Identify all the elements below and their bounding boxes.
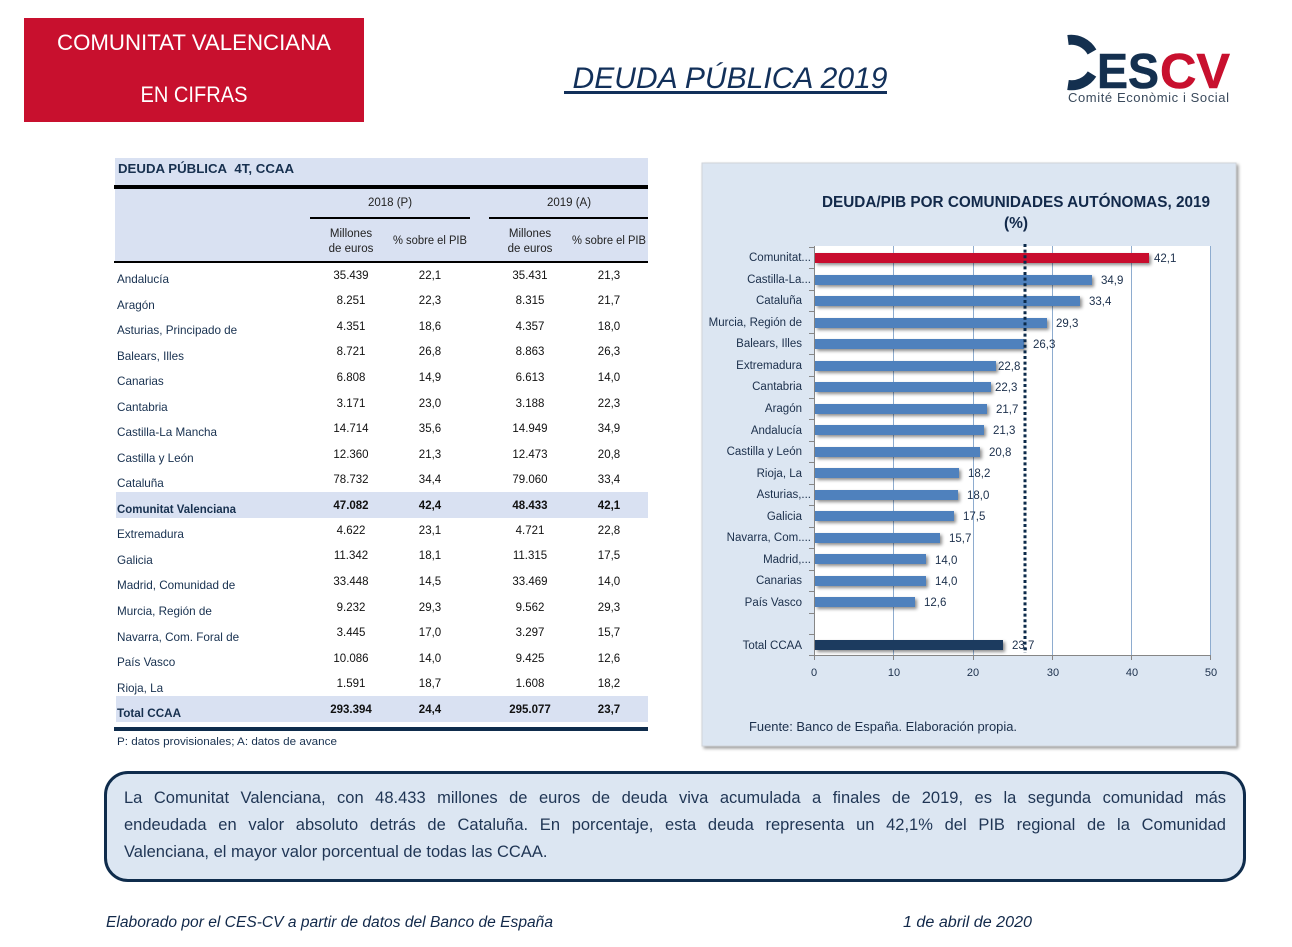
table rows: 33.448 bbox=[333, 576, 369, 588]
table rows: 14,9 bbox=[419, 372, 441, 384]
data labels: 17,5 bbox=[963, 511, 985, 523]
table rows: 4.357 bbox=[516, 321, 544, 333]
table rows: Extremadura bbox=[117, 528, 184, 541]
table rows: Murcia, Región de bbox=[117, 605, 212, 618]
table rows: 79.060 bbox=[512, 474, 548, 486]
table rows: 12.360 bbox=[333, 449, 369, 461]
table rows: 18,2 bbox=[598, 678, 620, 690]
table rows: 22,1 bbox=[419, 270, 441, 282]
table rows: Navarra, Com. Foral de bbox=[117, 631, 239, 644]
banner: Comunitat Valenciana en cifras bbox=[24, 18, 364, 122]
table rows: Madrid, Comunidad de bbox=[117, 579, 235, 592]
table rows: 9.425 bbox=[516, 653, 544, 665]
category labels: Navarra, Com.... bbox=[727, 532, 811, 544]
table rows: 12,6 bbox=[598, 653, 620, 665]
table rows: 21,3 bbox=[419, 449, 441, 461]
table column headers: 2018 (P) bbox=[368, 197, 412, 209]
data labels: 20,8 bbox=[989, 447, 1011, 459]
table rows: Aragón bbox=[117, 299, 155, 312]
table rows: 14.949 bbox=[512, 423, 548, 435]
table rows: 22,8 bbox=[598, 525, 620, 537]
x axis labels: 20 bbox=[967, 667, 979, 679]
data labels: 26,3 bbox=[1033, 339, 1055, 351]
table rows: Rioja, La bbox=[117, 682, 164, 695]
x axis labels: 50 bbox=[1205, 667, 1217, 679]
table rows: 295.077 bbox=[509, 704, 551, 716]
x axis labels: 40 bbox=[1126, 667, 1138, 679]
dotted average line bbox=[1024, 244, 1026, 653]
table rows: 12.473 bbox=[512, 449, 548, 461]
table rows: 42,1 bbox=[598, 500, 621, 512]
table rows: 8.863 bbox=[516, 346, 544, 358]
table rows: 35.439 bbox=[333, 270, 369, 282]
table rows: 21,3 bbox=[598, 270, 620, 282]
table rows: Castilla-La Mancha bbox=[117, 426, 218, 439]
table rows: 10.086 bbox=[333, 653, 369, 665]
chart source: Fuente: Banco de España. Elaboración propia. bbox=[749, 720, 1017, 734]
data labels: 21,7 bbox=[996, 404, 1018, 416]
data labels: 33,4 bbox=[1089, 296, 1112, 308]
table rows: 15,7 bbox=[598, 627, 620, 639]
table rows: Castilla y León bbox=[117, 452, 194, 465]
data labels: 14,0 bbox=[935, 555, 957, 567]
table rows: Galicia bbox=[117, 554, 153, 567]
banner: Comunitat Valenciana en cifras: EN CIFRAS bbox=[140, 82, 248, 107]
table rows: 14,0 bbox=[598, 576, 620, 588]
category labels: Aragón bbox=[765, 403, 802, 415]
category labels: Castilla-La... bbox=[747, 274, 811, 286]
table rows: Comunitat Valenciana bbox=[117, 503, 236, 516]
table rows: 17,0 bbox=[419, 627, 441, 639]
category labels: Comunitat... bbox=[749, 252, 811, 264]
table column headers: de euros bbox=[508, 243, 553, 255]
table rows: 42,4 bbox=[419, 500, 442, 512]
callout bbox=[104, 771, 1246, 882]
table rows: País Vasco bbox=[117, 656, 176, 669]
data labels: 22,8 bbox=[998, 361, 1020, 373]
category labels: Murcia, Región de bbox=[709, 317, 802, 329]
category labels: Cantabria bbox=[752, 381, 803, 393]
table rows: 35.431 bbox=[512, 270, 548, 282]
table rows: 34,4 bbox=[419, 474, 442, 486]
table heading: DEUDA PÚBLICA 4T, CCAA bbox=[118, 161, 295, 176]
table rows: 1.591 bbox=[337, 678, 365, 690]
table footnote: P: datos provisionales; A: datos de avance bbox=[117, 736, 337, 748]
category labels: Canarias bbox=[756, 575, 802, 587]
table rows: 18,1 bbox=[419, 550, 441, 562]
table rows: 22,3 bbox=[598, 398, 620, 410]
table column headers: % sobre el PIB bbox=[393, 235, 467, 247]
table rows: 14.714 bbox=[333, 423, 369, 435]
category labels: Balears, Illes bbox=[736, 338, 802, 350]
data labels: 29,3 bbox=[1056, 318, 1078, 330]
x axis labels: 30 bbox=[1047, 667, 1059, 679]
table rows: 4.622 bbox=[337, 525, 365, 537]
table rows: 11.342 bbox=[334, 550, 368, 562]
callout: endeudada en valor absoluto detrás de Cataluña. En porcentaje, esta deuda representa un 42,1% del PIB regional de la Comunidad bbox=[124, 816, 1226, 834]
table rows: 26,8 bbox=[419, 346, 441, 358]
data labels bbox=[924, 253, 1176, 652]
table rows: 33.469 bbox=[512, 576, 548, 588]
footer right: 1 de abril de 2020 bbox=[903, 914, 1032, 931]
table rows: 8.315 bbox=[516, 295, 544, 307]
table rows bbox=[117, 270, 621, 720]
table rows: Andalucía bbox=[117, 273, 169, 286]
table rows: 23,0 bbox=[419, 398, 441, 410]
table rows: 24,4 bbox=[419, 704, 442, 716]
category labels: Asturias,... bbox=[757, 489, 811, 501]
chart title: DEUDA/PIB POR COMUNIDADES AUTÓNOMAS, 2019 bbox=[822, 193, 1210, 211]
plot area bbox=[814, 246, 1211, 655]
table rows: 3.297 bbox=[516, 627, 544, 639]
logo: CESCV: CV bbox=[1160, 45, 1230, 99]
table rows: 18,7 bbox=[419, 678, 441, 690]
table rows: 34,9 bbox=[598, 423, 620, 435]
table rows: 33,4 bbox=[598, 474, 621, 486]
panel: data table bbox=[114, 158, 648, 748]
data labels: 22,3 bbox=[995, 382, 1017, 394]
table rows: 3.171 bbox=[337, 398, 365, 410]
table rows: 26,3 bbox=[598, 346, 620, 358]
banner: Comunitat Valenciana en cifras: COMUNITAT VALENCIANA bbox=[57, 30, 331, 55]
callout: La Comunitat Valenciana, con 48.433 millones de euros de deuda viva acumulada a finales de 2019, es la segunda comunidad más bbox=[124, 789, 1226, 807]
chart title bbox=[822, 193, 1210, 232]
table rows: 11.315 bbox=[513, 550, 547, 562]
logo: CESCV: Comité Econòmic i Social bbox=[1068, 90, 1229, 105]
category labels: Andalucía bbox=[751, 425, 803, 437]
table rows: 23,7 bbox=[598, 704, 620, 716]
table rows: 9.232 bbox=[337, 602, 365, 614]
table column headers: Millones bbox=[330, 228, 372, 240]
table rows: 4.351 bbox=[337, 321, 365, 333]
x axis labels bbox=[811, 667, 1217, 679]
table rows: 23,1 bbox=[419, 525, 441, 537]
chart title: (%) bbox=[1004, 215, 1028, 232]
table rows: Canarias bbox=[117, 375, 164, 388]
bars bbox=[815, 253, 1149, 650]
table rows: 14,0 bbox=[419, 653, 441, 665]
table rows: 22,3 bbox=[419, 295, 441, 307]
callout: Valenciana, el mayor valor porcentual de todas las CCAA. bbox=[124, 843, 547, 861]
footer left: Elaborado por el CES-CV a partir de datos del Banco de España bbox=[106, 914, 553, 931]
table rows: 9.562 bbox=[516, 602, 544, 614]
data labels: 14,0 bbox=[935, 576, 957, 588]
table rows: 8.721 bbox=[337, 346, 365, 358]
data labels: 18,2 bbox=[968, 468, 990, 480]
category labels: Total CCAA bbox=[743, 640, 802, 652]
table rows: 3.445 bbox=[337, 627, 365, 639]
table rows: 8.251 bbox=[337, 295, 365, 307]
x axis labels: 10 bbox=[888, 667, 900, 679]
table rows: Asturias, Principado de bbox=[117, 324, 237, 337]
table column headers bbox=[329, 197, 646, 255]
table rows: 6.808 bbox=[337, 372, 365, 384]
table rows: 35,6 bbox=[419, 423, 441, 435]
table rows: 6.613 bbox=[516, 372, 544, 384]
table rows: 3.188 bbox=[516, 398, 544, 410]
x axis labels: 0 bbox=[811, 667, 817, 679]
table rows: Total CCAA bbox=[117, 707, 182, 720]
table rows: 18,6 bbox=[419, 321, 441, 333]
table column headers: 2019 (A) bbox=[547, 197, 591, 209]
category labels bbox=[709, 252, 811, 652]
data labels: 18,0 bbox=[967, 490, 989, 502]
data labels: 15,7 bbox=[949, 533, 971, 545]
table rows: 21,7 bbox=[598, 295, 620, 307]
data labels: 12,6 bbox=[924, 597, 946, 609]
table column headers: Millones bbox=[509, 228, 551, 240]
table rows: Cantabria bbox=[117, 401, 168, 414]
table rows: 20,8 bbox=[598, 449, 620, 461]
data labels: 21,3 bbox=[993, 425, 1015, 437]
table rows: 78.732 bbox=[333, 474, 369, 486]
category labels: Rioja, La bbox=[757, 468, 803, 480]
table rows: 17,5 bbox=[598, 550, 620, 562]
logo: CESCV: ES bbox=[1097, 45, 1159, 99]
data labels: 34,9 bbox=[1101, 275, 1123, 287]
category labels: Extremadura bbox=[736, 360, 803, 372]
category labels: Cataluña bbox=[756, 295, 803, 307]
table rows: 1.608 bbox=[516, 678, 544, 690]
table rows: 29,3 bbox=[419, 602, 441, 614]
data labels: 42,1 bbox=[1154, 253, 1176, 265]
category labels: Madrid,... bbox=[763, 554, 811, 566]
table rows: 47.082 bbox=[333, 500, 369, 512]
category labels: Castilla y León bbox=[727, 446, 802, 458]
table rows: 14,5 bbox=[419, 576, 441, 588]
table rows: Cataluña bbox=[117, 477, 164, 490]
table rows: Balears, Illes bbox=[117, 350, 184, 363]
category labels: País Vasco bbox=[745, 597, 802, 609]
panel: bar chart bbox=[702, 163, 1236, 746]
table rows: 48.433 bbox=[512, 500, 548, 512]
table column headers: % sobre el PIB bbox=[572, 235, 646, 247]
logo: CESCV bbox=[1068, 40, 1230, 105]
table rows: 293.394 bbox=[330, 704, 372, 716]
table rows: 18,0 bbox=[598, 321, 620, 333]
category labels: Galicia bbox=[767, 511, 803, 523]
table column headers: de euros bbox=[329, 243, 374, 255]
table rows: 4.721 bbox=[516, 525, 544, 537]
data labels: 23,7 bbox=[1012, 640, 1034, 652]
table rows: 14,0 bbox=[598, 372, 620, 384]
title: DEUDA PÚBLICA 2019 bbox=[572, 62, 888, 95]
table rows: 29,3 bbox=[598, 602, 620, 614]
